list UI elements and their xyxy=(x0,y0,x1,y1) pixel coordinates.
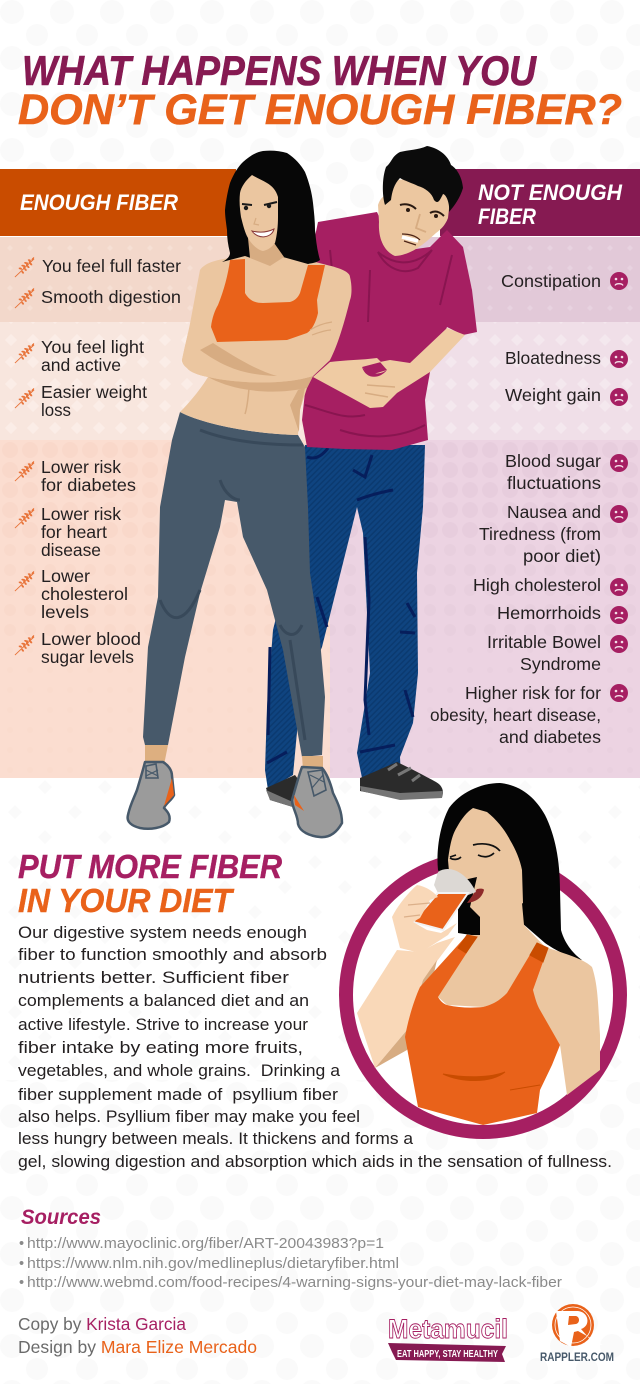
effect xyxy=(479,502,601,566)
heading: put more fiber: PUT MORE FIBER xyxy=(18,848,282,885)
benefit: You feel full faster xyxy=(42,256,181,276)
icon: wheat xyxy=(15,635,34,655)
benefit: disease xyxy=(41,540,101,560)
logo: metamucil: EAT HAPPY, STAY HEALTHY xyxy=(397,1348,498,1360)
icon: sad face xyxy=(610,272,628,290)
effect: Constipation xyxy=(501,271,601,291)
benefit xyxy=(41,382,147,420)
icon: wheat xyxy=(15,461,34,481)
credits xyxy=(18,1314,257,1357)
benefit xyxy=(41,337,144,375)
benefit xyxy=(41,566,128,622)
woman's shoes xyxy=(128,762,342,837)
benefit: Lower xyxy=(41,566,90,586)
woman's body xyxy=(180,254,352,435)
logo: rappler: RAPPLER.COM xyxy=(540,1352,614,1364)
list: not enough fiber effects xyxy=(430,271,628,747)
effect: and diabetes xyxy=(499,727,601,747)
icon: sad face xyxy=(610,578,628,596)
far arm xyxy=(533,948,600,1095)
tank top xyxy=(405,935,560,1125)
heading: not enough fiber: NOT ENOUGH xyxy=(478,180,623,205)
text block: diet advice: nutrients better. Sufficient fiber xyxy=(18,968,289,987)
text block: diet advice: fiber supplement made of psyllium fiber xyxy=(18,1085,338,1104)
effect: Bloatedness xyxy=(505,348,601,368)
benefit: for diabetes xyxy=(41,475,136,495)
benefit xyxy=(41,457,136,495)
benefit: and active xyxy=(41,355,121,375)
ring xyxy=(346,858,620,1132)
heading: enough fiber: ENOUGH FIBER xyxy=(20,190,178,215)
benefit: levels xyxy=(41,602,89,622)
woman's head xyxy=(222,151,320,266)
effect: poor diet) xyxy=(523,546,601,566)
heading: not enough fiber xyxy=(478,180,623,229)
benefit: Easier weight xyxy=(41,382,147,402)
effect: fluctuations xyxy=(507,473,601,493)
heading: put more fiber: IN YOUR DIET xyxy=(18,882,235,919)
benefit: loss xyxy=(41,400,71,420)
text block: diet advice: fiber to function smoothly and absorb xyxy=(18,945,327,964)
icon: wheat xyxy=(15,343,34,363)
hand xyxy=(392,885,457,953)
effect: High cholesterol xyxy=(473,575,601,595)
benefit: Lower risk xyxy=(41,457,121,477)
credits: Design by Mara Elize Mercado xyxy=(18,1337,257,1357)
effect: Nausea and xyxy=(507,502,601,522)
text block: diet advice: vegetables, and whole grains. Drinking a xyxy=(18,1061,341,1080)
icon: sad face xyxy=(610,350,628,368)
list: sources: • xyxy=(19,1236,24,1252)
icon: sad face xyxy=(610,388,628,406)
title: DON’T GET ENOUGH FIBER? xyxy=(18,86,622,134)
heading: put more fiber xyxy=(18,848,282,919)
text block: diet advice: less hungry between meals. It thickens and forms a xyxy=(18,1129,414,1148)
logo: metamucil xyxy=(388,1314,508,1362)
effect: obesity, heart disease, xyxy=(430,705,601,725)
effect: Hemorrhoids xyxy=(497,603,601,623)
face xyxy=(448,808,523,917)
illustration: woman drinking xyxy=(346,783,620,1132)
man's shirt xyxy=(300,212,477,450)
effect: Irritable Bowel xyxy=(487,632,601,652)
logo: metamucil: Metamucil xyxy=(388,1314,508,1344)
text block: diet advice: Our digestive system needs enough xyxy=(18,923,307,942)
woman's leggings xyxy=(143,412,325,757)
list: sources: http://www.mayoclinic.org/fiber/ART-20043983?p=1 xyxy=(27,1236,384,1252)
near arm xyxy=(357,937,455,1068)
benefit: for heart xyxy=(41,522,107,542)
effect xyxy=(430,683,601,747)
list: enough fiber benefits xyxy=(15,256,181,667)
text block: diet advice: fiber intake by eating more fruits, xyxy=(18,1038,303,1057)
benefit: Lower risk xyxy=(41,504,121,524)
title xyxy=(18,47,622,134)
man's shoes xyxy=(266,762,443,808)
icon: sad face xyxy=(610,606,628,624)
man's hand and forearm xyxy=(313,328,465,408)
icon: sad face xyxy=(610,454,628,472)
woman's top xyxy=(211,259,325,342)
illustration: couple xyxy=(128,146,477,837)
man's shirt folds xyxy=(305,250,452,436)
list: sources xyxy=(19,1236,562,1291)
effect: Tiredness (from xyxy=(479,524,601,544)
hair xyxy=(437,783,582,960)
panel: not enough fiber background xyxy=(330,169,640,778)
icon: sad face xyxy=(610,684,628,702)
effect xyxy=(487,632,601,674)
woman's crossed arm xyxy=(182,322,332,382)
benefit: Smooth digestion xyxy=(41,287,181,307)
effect: Weight gain xyxy=(505,385,601,405)
list: sources: • xyxy=(19,1256,24,1272)
icon: wheat xyxy=(15,571,34,591)
effect: Syndrome xyxy=(520,654,601,674)
icon: sad face xyxy=(610,505,628,523)
text block: diet advice: complements a balanced diet and an xyxy=(18,991,309,1010)
logo: rappler xyxy=(540,1304,614,1364)
icon: wheat xyxy=(15,257,34,277)
heading: not enough fiber: FIBER xyxy=(478,204,536,229)
benefit: sugar levels xyxy=(41,647,134,667)
icon: wheat xyxy=(15,288,34,308)
list: sources: • xyxy=(19,1275,24,1291)
glass xyxy=(434,869,476,895)
woman's socks xyxy=(145,745,323,770)
benefit: cholesterol xyxy=(41,584,128,604)
text block: diet advice: also helps. Psyllium fiber may make you feel xyxy=(18,1107,360,1126)
man's jeans xyxy=(265,445,425,790)
effect: Blood sugar xyxy=(505,451,601,471)
icon: wheat xyxy=(15,508,34,528)
panel: enough fiber background xyxy=(0,169,330,778)
neck and chest xyxy=(438,903,548,1007)
benefit: Lower blood xyxy=(41,629,141,649)
list: sources: http://www.webmd.com/food-recipes/4-warning-signs-your-diet-may-lack-fiber xyxy=(27,1275,562,1291)
text block: diet advice: active lifestyle. Strive to increase your xyxy=(18,1015,308,1034)
benefit: You feel light xyxy=(41,337,144,357)
effect: Higher risk for for xyxy=(465,683,601,703)
heading: sources: Sources xyxy=(21,1206,101,1229)
icon: wheat xyxy=(15,388,34,408)
man's head xyxy=(378,146,463,256)
benefit xyxy=(41,504,121,560)
effect xyxy=(505,451,601,493)
text block: diet advice: gel, slowing digestion and absorption which aids in the sensation of fullness. xyxy=(18,1152,612,1171)
text block: diet advice xyxy=(18,923,612,1171)
credits: Copy by Krista Garcia xyxy=(18,1314,186,1334)
title: WHAT HAPPENS WHEN YOU xyxy=(22,47,537,94)
benefit xyxy=(41,629,141,667)
list: sources: https://www.nlm.nih.gov/medlineplus/dietaryfiber.html xyxy=(27,1256,399,1272)
icon: sad face xyxy=(610,635,628,653)
